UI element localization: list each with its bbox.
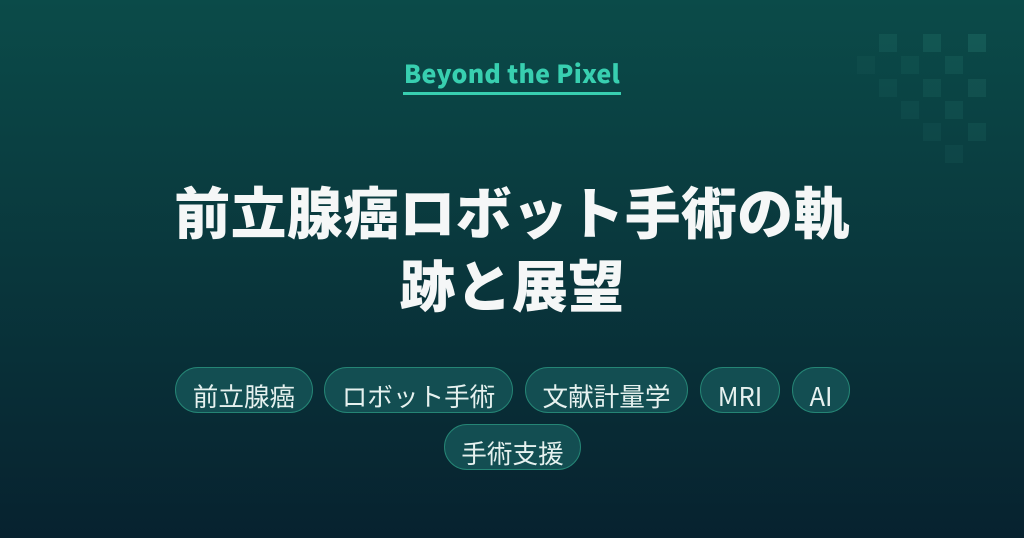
decorative pixel grid xyxy=(879,34,986,141)
tag: AI xyxy=(792,367,850,413)
title xyxy=(174,170,850,324)
tag: 前立腺癌: 前立腺癌 xyxy=(193,377,295,414)
tag: 文献計量学 xyxy=(525,367,688,413)
tag: 文献計量学: 文献計量学 xyxy=(542,377,670,414)
tag: ロボット手術 xyxy=(324,367,513,413)
brand label with underline: Beyond the Pixel xyxy=(404,55,620,91)
tags xyxy=(175,367,850,471)
tag: 手術支援 xyxy=(444,424,581,470)
title: 跡と展望 xyxy=(399,243,625,324)
tag: 前立腺癌 xyxy=(175,367,313,413)
tag: 手術支援: 手術支援 xyxy=(461,434,564,471)
title: 前立腺癌ロボット手術の軌 xyxy=(174,170,850,251)
tag: ロボット手術: ロボット手術 xyxy=(342,377,495,414)
tag: MRI xyxy=(700,367,780,413)
tag: MRI: MRI xyxy=(718,377,762,414)
tag: AI: AI xyxy=(809,377,833,414)
